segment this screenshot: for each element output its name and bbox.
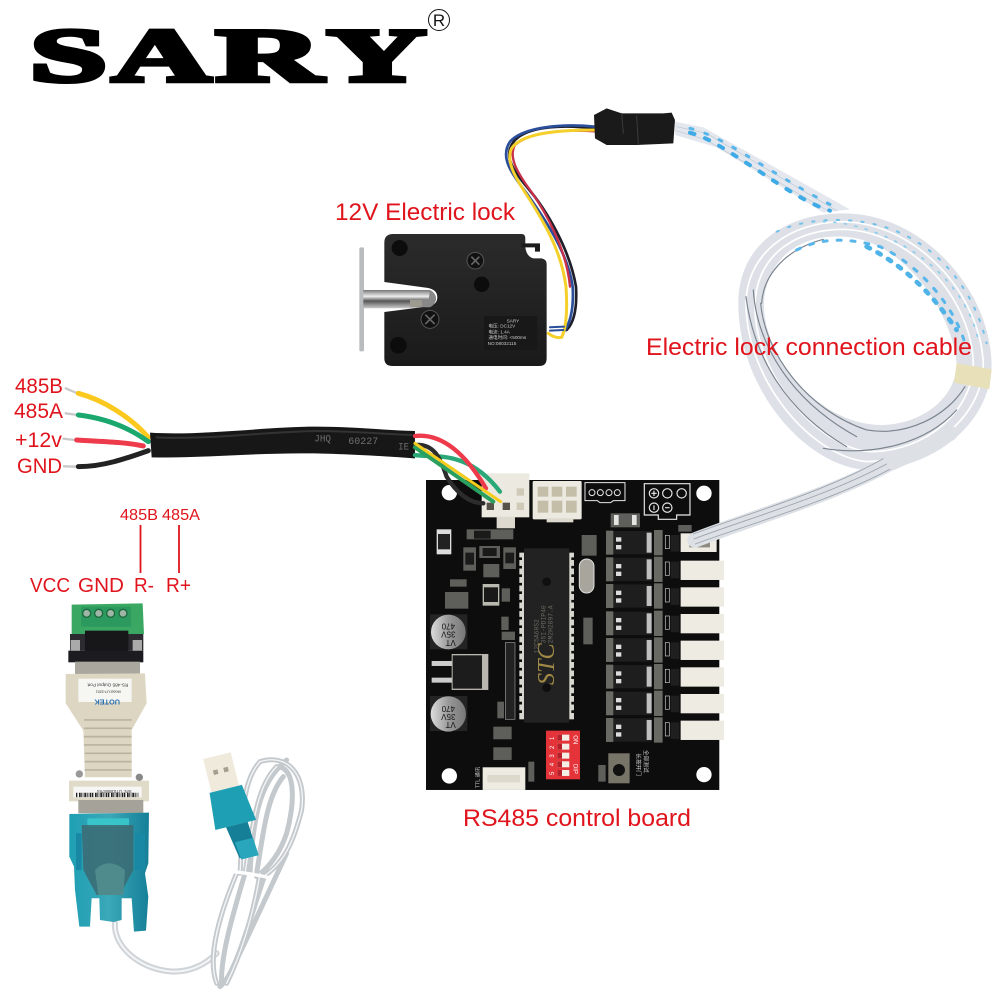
electrolytic capacitors: 35V bbox=[441, 712, 455, 721]
speckled top lead bbox=[675, 122, 850, 213]
sheath print: JHQ bbox=[314, 434, 331, 445]
lock label bbox=[484, 316, 537, 350]
DIP40 microcontroller: 2M2H2897.A bbox=[548, 605, 555, 643]
DIP40 microcontroller: 12C5A60S2 bbox=[533, 619, 540, 653]
MOSFET column bbox=[606, 530, 679, 743]
tape bbox=[954, 363, 992, 389]
voltage regulator bbox=[432, 654, 488, 690]
ribbon lead to board bbox=[693, 433, 950, 544]
lock screws bbox=[467, 252, 484, 269]
electrolytic capacitors: VT bbox=[445, 720, 456, 729]
sheath print bbox=[314, 434, 409, 452]
electrolytic capacitors: 470 bbox=[441, 621, 455, 630]
PCB bbox=[426, 480, 719, 790]
conductors entering board connector bbox=[415, 436, 501, 503]
TTL caption: TTL 通讯 bbox=[473, 766, 481, 788]
logo: SARY bbox=[30, 14, 426, 98]
label: 12V Electric lock: 12V Electric lock bbox=[335, 199, 516, 226]
adapter label: RS-485 Output Port bbox=[87, 682, 128, 687]
power input connector bbox=[482, 473, 529, 528]
adapter signal labels: VCC bbox=[30, 575, 70, 597]
lock label: SARY bbox=[507, 318, 519, 323]
logo: registered mark: R bbox=[433, 11, 445, 30]
DIP40 microcontroller bbox=[519, 548, 574, 723]
push button bbox=[608, 753, 630, 783]
connector bbox=[594, 108, 675, 145]
DIP switch: 4 bbox=[550, 762, 556, 766]
logo: SARY: S bbox=[30, 14, 107, 98]
adapter signal labels: 485A bbox=[162, 507, 200, 524]
ribbon cable bbox=[675, 122, 992, 470]
serial plate and barcode: S/N: UT03858784 bbox=[96, 789, 132, 794]
sheath print: IE bbox=[398, 441, 409, 452]
left conductors bbox=[78, 393, 148, 437]
wire labels: +12v bbox=[15, 429, 63, 452]
coil body bbox=[738, 213, 992, 470]
DIP switch: 3 bbox=[550, 754, 556, 758]
lock output connectors bbox=[681, 533, 724, 740]
TTL connector bbox=[483, 767, 525, 790]
mounting holes bbox=[442, 485, 712, 784]
wires bbox=[509, 127, 595, 330]
electrolytic capacitors: VT bbox=[445, 638, 456, 647]
adapter signal labels: 485B bbox=[120, 507, 158, 524]
electrolytic capacitors: 35V bbox=[441, 630, 455, 639]
terminal board bbox=[72, 603, 144, 635]
wire labels: 485B bbox=[15, 375, 63, 398]
adapter signal labels: R+ bbox=[166, 575, 191, 597]
lock label: 电流: 1.4A bbox=[488, 328, 511, 335]
lock label: 电压: DC12V bbox=[488, 323, 516, 330]
translucent teal shell bbox=[69, 813, 149, 932]
adapter label: Model:UT-2201 bbox=[96, 690, 121, 694]
adapter label: UOTEK bbox=[94, 697, 120, 706]
wire labels: GND bbox=[17, 455, 62, 478]
USB plug bbox=[198, 750, 265, 864]
green terminal block bbox=[81, 607, 131, 627]
logo: SARY: Y bbox=[327, 14, 426, 98]
RS485 to USB adapter bbox=[66, 603, 265, 932]
stripped tips bbox=[63, 388, 77, 467]
lock label: NO:08032115 bbox=[488, 341, 517, 346]
electrolytic capacitors: 470 bbox=[441, 704, 455, 713]
coil strand lines bbox=[746, 222, 983, 462]
logo: SARY: A bbox=[112, 14, 211, 98]
lock wiring and connector bbox=[506, 108, 675, 338]
DIP switch: DIP bbox=[571, 764, 577, 774]
five-pole terminal outline bbox=[644, 484, 690, 519]
wire labels: 485A bbox=[14, 400, 63, 423]
beige adapter body bbox=[66, 673, 147, 777]
sheath print: 60227 bbox=[348, 436, 378, 447]
black sheath bbox=[150, 427, 415, 458]
lock body bbox=[384, 234, 547, 366]
wire labels bbox=[14, 375, 63, 478]
DIP40 microcontroller: STC bbox=[534, 642, 560, 685]
small SMD parts bbox=[437, 513, 692, 782]
DIP switch: 1 bbox=[550, 736, 556, 740]
crystal bbox=[579, 559, 594, 593]
electrolytic capacitors bbox=[430, 614, 467, 732]
adapter signal labels bbox=[30, 507, 200, 597]
lock label: 通电时间: <500ms bbox=[488, 334, 527, 341]
metal neck bbox=[78, 800, 143, 813]
lock plate bbox=[359, 247, 364, 351]
metal D-sub shell bbox=[75, 662, 140, 674]
label: Electric lock connection cable: Electric lock connection cable bbox=[646, 334, 972, 361]
lock mounting holes bbox=[392, 240, 408, 256]
serial plate and barcode bbox=[69, 770, 149, 801]
DIP switch bbox=[546, 731, 580, 779]
label: RS485 control board: RS485 control board bbox=[463, 805, 691, 832]
sheathed 4-core cable bbox=[63, 388, 415, 467]
button caption: 长按开门 bbox=[635, 753, 643, 776]
slot bbox=[505, 643, 515, 719]
DIP switch: ON bbox=[571, 735, 577, 744]
DIP40 microcontroller: 35I-PDIP40 bbox=[541, 605, 548, 643]
electric lock bbox=[359, 234, 547, 366]
logo: SARY: R bbox=[216, 14, 324, 98]
six-pin connector bbox=[533, 481, 582, 522]
button caption: 全部测试 bbox=[642, 750, 650, 773]
RS485 control board bbox=[426, 473, 724, 790]
DIP switch: 2 bbox=[550, 745, 556, 749]
USB silver cable bbox=[115, 760, 302, 987]
button caption bbox=[635, 750, 650, 776]
DIP switch: 5 bbox=[550, 771, 556, 775]
adapter label bbox=[78, 679, 132, 706]
black D-sub header bbox=[68, 631, 143, 662]
lock bolt bbox=[363, 290, 430, 308]
blue speckles on coil bbox=[777, 220, 987, 343]
adapter signal labels: GND bbox=[78, 575, 124, 597]
adapter signal labels: R- bbox=[134, 575, 154, 597]
four-pin header outline bbox=[585, 483, 625, 503]
logo: registered mark bbox=[428, 10, 450, 30]
